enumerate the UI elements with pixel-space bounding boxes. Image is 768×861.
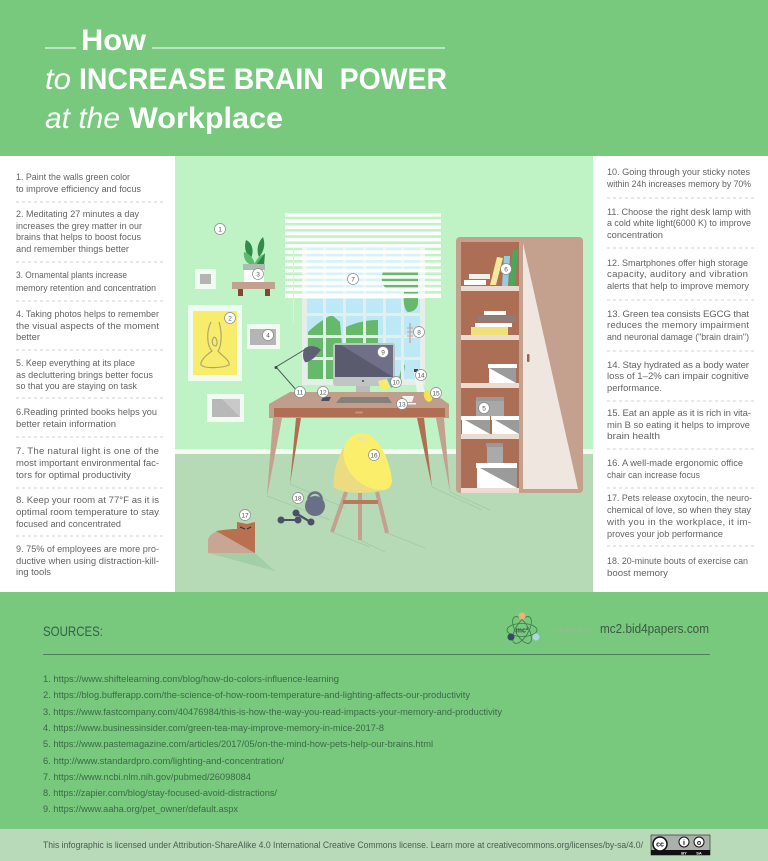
tip 8 (16, 495, 159, 530)
tip 3: 3. Ornamental plants increase (16, 270, 127, 281)
tip 6 (16, 407, 157, 430)
tip 11: a cold white light(6000 K) to improve (607, 218, 751, 229)
title: to (45, 63, 71, 96)
tip 3 (16, 270, 156, 294)
cup of green tea (400, 396, 416, 404)
tip 12: alerts that help to improve memory (607, 281, 749, 292)
numbered markers: 2 (228, 315, 232, 322)
tip 4 (16, 309, 160, 343)
title (45, 24, 447, 135)
tip 14: performance. (607, 383, 662, 394)
tip 18 (607, 556, 748, 579)
logo: mc2 atom: mc² (516, 628, 529, 634)
sources heading: SOURCES: (43, 623, 103, 639)
cc by-sa badge: i (683, 840, 685, 847)
bookcase (456, 237, 583, 493)
tip 17 (606, 493, 752, 540)
tip 16 (607, 458, 743, 481)
tip 7 (16, 446, 159, 481)
plant on shelf (232, 237, 275, 296)
footer band (0, 829, 768, 861)
tip 15: brain health (607, 431, 660, 442)
sources list: 5. https://www.pastemagazine.com/articles/2017/05/on-the-mind-how-pets-help-our-brains.html (43, 739, 433, 750)
tip 15 (607, 408, 751, 442)
tip 17: chemical of love, so when they stay (607, 505, 751, 516)
kettlebell (305, 492, 325, 516)
tip 10: within 24h increases memory by 70% (606, 179, 751, 190)
tip 16: 16. A well-made ergonomic office (607, 458, 743, 469)
tip 2: 2. Meditating 27 minutes a day (16, 209, 139, 220)
window blinds (285, 213, 441, 323)
tip 6: 6.Reading printed books helps you (16, 407, 157, 418)
title: at the (45, 102, 120, 135)
tip 7: 7. The natural light is one of the (16, 446, 159, 457)
tip 2: brains that helps to boost focus (16, 232, 141, 243)
tip 3: memory retention and concentration (16, 283, 156, 294)
cc by-sa badge: SA (696, 850, 702, 855)
floor (175, 454, 593, 592)
numbered markers: 1 (218, 226, 222, 233)
tip 7: tors for optimal productivity (16, 470, 131, 481)
numbered markers: 5 (482, 405, 486, 412)
numbered markers: 15 (432, 390, 440, 397)
tip 17: 17. Pets release oxytocin, the neuro- (607, 493, 752, 504)
numbered markers: 8 (417, 329, 421, 336)
panel: left tips column (0, 156, 175, 592)
numbered markers: 4 (266, 332, 270, 339)
tip 2: increases the grey matter in our (16, 221, 143, 232)
numbered markers: 12 (319, 389, 327, 396)
tip 12: 12. Smartphones offer high storage (607, 258, 748, 269)
storage boxes (461, 364, 519, 488)
tip 2: and remember things better (16, 244, 130, 255)
tip 8: optimal room temperature to stay (16, 507, 159, 518)
window (302, 248, 425, 385)
panel: right tips column (593, 156, 768, 592)
panel: office illustration (175, 156, 593, 592)
tip 13 (607, 309, 749, 343)
desk lamp (274, 346, 321, 401)
tip 1 (16, 172, 141, 195)
sources list: 8. https://zapier.com/blog/stay-focused-avoid-distractions/ (43, 788, 277, 799)
tip 4: better (16, 332, 41, 343)
desk (267, 392, 450, 496)
tip 1: to improve efficiency and focus (16, 184, 141, 195)
logo: mc2 atom (507, 612, 540, 646)
ergonomic chair (332, 433, 392, 540)
tip 11: 11. Choose the right desk lamp with (607, 207, 751, 218)
cat (208, 522, 275, 571)
tip 9: 9. 75% of employees are more pro- (16, 544, 159, 555)
tip 18: 18. 20-minute bouts of exercise can (607, 556, 748, 567)
numbered markers: 13 (398, 401, 406, 408)
sources list: 1. https://www.shiftelearning.com/blog/how-do-colors-influence-learning (43, 674, 339, 685)
apple (422, 389, 434, 403)
numbered markers (214, 224, 512, 520)
cc by-sa badge (651, 835, 710, 855)
tip 9: ductive when using distraction-kill- (16, 556, 159, 567)
tip 11 (607, 207, 751, 241)
tip 10: 10. Going through your sticky notes (607, 167, 750, 178)
thermometer (407, 323, 413, 343)
sources list: 6. http://www.standardpro.com/lighting-and-concentration/ (43, 756, 284, 767)
tip 17: with you in the workplace, it im- (606, 517, 751, 528)
title: INCREASE BRAIN POWER (79, 63, 447, 96)
lower wall frame (207, 394, 244, 422)
tip 5: so that you are staying on task (16, 381, 137, 392)
tip 10 (606, 167, 751, 190)
title: Workplace (129, 102, 283, 135)
tip 13: 13. Green tea consists EGCG that (607, 309, 749, 320)
created by credit: created by (552, 625, 593, 635)
tip 9: ing tools (16, 567, 51, 578)
tip 8: 8. Keep your room at 77°F as it is (16, 495, 159, 506)
numbered markers: 10 (392, 379, 400, 386)
phone (321, 397, 331, 401)
numbered markers: 14 (417, 372, 425, 379)
cc by-sa badge: o (697, 840, 701, 847)
tip 15: min B so eating it helps to improve (607, 420, 750, 431)
created by credit (552, 622, 709, 636)
tip 11: concentration (607, 230, 663, 241)
tip 18: boost memory (607, 568, 668, 579)
sources list: 9. https://www.aaha.org/pet_owner/default.aspx (43, 804, 238, 815)
numbered markers: 9 (381, 349, 385, 356)
tip 2 (16, 209, 143, 255)
tip 7: most important environmental fac- (16, 458, 159, 469)
keyboard (336, 397, 392, 403)
tip 13: reduces the memory impairment (607, 320, 749, 331)
dumbbells (278, 510, 314, 526)
numbered markers: 3 (256, 271, 260, 278)
license text: This infographic is licensed under Attribution-ShareAlike 4.0 International Creative Commons license. Learn more at creativecommons.org/licenses/by-sa/4.0/ (43, 840, 644, 850)
tip 5 (16, 358, 153, 392)
tip 5: 5. Keep everything at its place (16, 358, 135, 369)
tip 17: proves your job performance (607, 529, 723, 540)
tip 13: and neuronal damage ("brain drain") (607, 332, 749, 343)
tip 5: as decluttering brings better focus (16, 370, 153, 381)
sources list: 4. https://www.businessinsider.com/green-tea-may-improve-memory-in-mice-2017-8 (43, 723, 384, 734)
created by credit: mc2.bid4papers.com (600, 622, 709, 636)
tip 16: chair can increase focus (607, 470, 700, 481)
small wall frame (195, 269, 216, 289)
water bottle (414, 369, 425, 392)
sources list: 2. https://blog.bufferapp.com/the-science-of-how-room-temperature-and-lighting-affects-our-productivity (43, 690, 470, 701)
tip 15: 15. Eat an apple as it is rich in vita- (607, 408, 751, 419)
numbered markers: 18 (294, 495, 302, 502)
tip 14: loss of 1–2% can impair cognitive (607, 371, 749, 382)
tip 6: better retain information (16, 419, 116, 430)
cc by-sa badge: BY (681, 850, 687, 855)
tip 14 (607, 360, 750, 394)
wall (175, 156, 593, 450)
sources list (43, 674, 502, 815)
numbered markers: 16 (370, 452, 378, 459)
sources list: 3. https://www.fastcompany.com/40476984/this-is-how-the-way-you-read-impacts-your-memory-and-productivity (43, 707, 502, 718)
sources list: 7. https://www.ncbi.nlm.nih.gov/pubmed/26098084 (43, 772, 252, 783)
tip 8: focused and concentrated (16, 519, 121, 530)
title: How (81, 24, 147, 57)
numbered markers: 17 (241, 512, 249, 519)
sticky notes (378, 376, 397, 390)
numbered markers: 11 (297, 389, 304, 396)
tip 14: 14. Stay hydrated as a body water (607, 360, 750, 371)
books (464, 250, 518, 335)
tip 4: the visual aspects of the moment (16, 321, 159, 332)
cc by-sa badge: cc (656, 842, 664, 848)
tip 12 (607, 258, 749, 292)
numbered markers: 7 (351, 276, 355, 283)
tip 12: capacity, auditory and vibration (607, 269, 748, 280)
numbered markers: 6 (504, 266, 508, 273)
yellow meditation poster (188, 305, 242, 381)
monitor (333, 343, 395, 393)
tip 4: 4. Taking photos helps to remember (16, 309, 160, 320)
tip 1: 1. Paint the walls green color (16, 172, 131, 183)
wall frame 4 (247, 324, 280, 349)
tip 9 (16, 544, 159, 578)
